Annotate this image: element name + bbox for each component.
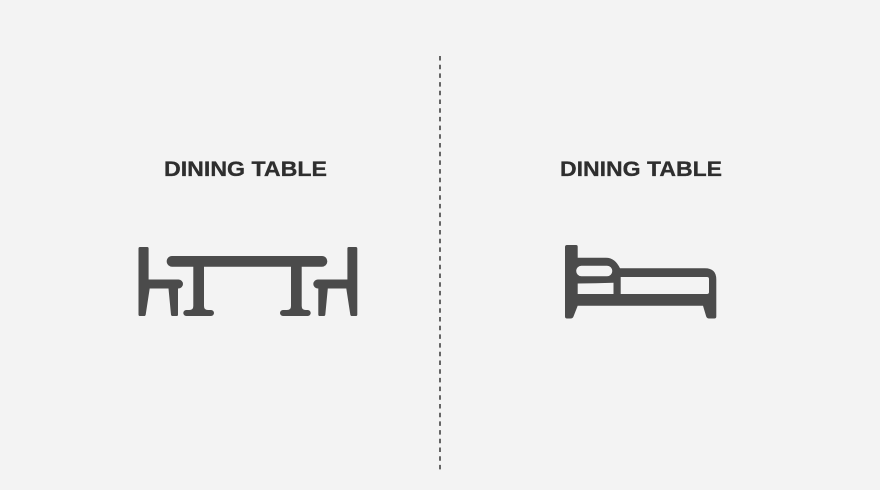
right chair xyxy=(313,247,357,316)
left heading: DINING TABLE xyxy=(164,158,327,181)
bed frame, headboard and pillow xyxy=(565,245,716,318)
centre dashed divider xyxy=(439,56,441,470)
right table leg and foot xyxy=(280,265,311,316)
right heading: DINING TABLE xyxy=(560,158,722,181)
table top xyxy=(167,256,327,267)
left chair xyxy=(138,247,183,316)
left table leg and foot xyxy=(183,265,214,316)
icon: dining table with two chairs xyxy=(138,247,357,316)
icon: bed xyxy=(565,245,716,318)
